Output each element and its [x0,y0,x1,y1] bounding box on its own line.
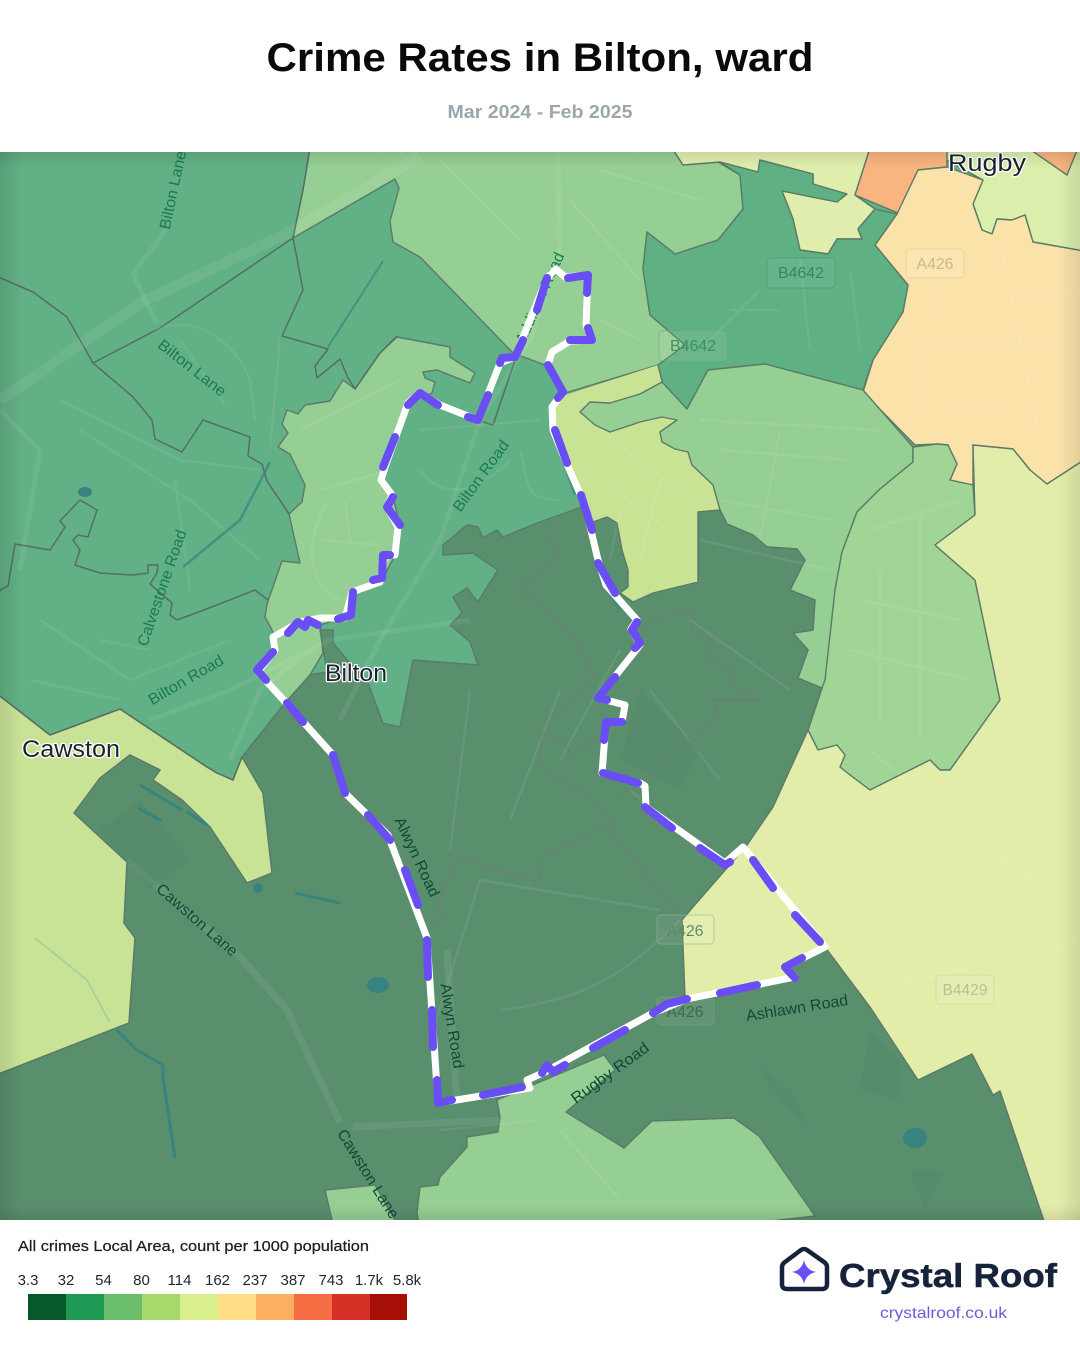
legend scale labels: 387 [280,1272,306,1289]
icon: house with star [782,1249,827,1289]
shield: B4429 [936,975,994,1004]
legend title: All crimes Local Area, count per 1000 population [18,1238,369,1255]
subtitle: date range: Mar 2024 - Feb 2025 [448,102,632,122]
road label: Rugby Road: Rugby Road [568,1039,653,1107]
dark-area internal boundaries [430,533,760,930]
title: Crime Rates in Bilton, ward [266,36,814,80]
shield: A426 south: A426 [666,1004,704,1021]
shield: A426 north: A426 [916,256,954,273]
shield: B4642 east [767,258,835,288]
road label: Cawston Lane west: Cawston Lane [153,881,241,960]
legend scale labels [18,1272,422,1289]
brand website: crystalroof.co.uk [880,1305,1008,1322]
legend colour bar [28,1294,407,1320]
road label: Alwyn Road south: Alwyn Road [436,982,467,1070]
legend scale labels: 3.3 [18,1272,38,1289]
brand name: Crystal Roof [839,1257,1058,1294]
legend scale labels: 32 [58,1272,74,1289]
shield: B4642 east: B4642 [778,265,824,282]
road label: Bilton Road centre: Bilton Road [450,437,513,515]
road label: Bilton Road west: Bilton Road [146,652,227,709]
brand logo [782,1249,1058,1322]
map edge shading [0,152,1080,1220]
legend scale labels: 80 [133,1272,150,1289]
place label: Rugby: Rugby [948,150,1026,177]
choropleth map panel [0,148,1080,1224]
legend scale labels: 162 [205,1272,230,1289]
shield: A426 south [657,997,714,1025]
road label: Calvestone Road: Calvestone Road [135,528,190,649]
road shields [657,249,994,1025]
road label: Bilton Lane: Bilton Lane [154,336,229,400]
legend scale labels: 114 [168,1272,191,1289]
legend scale labels: 54 [95,1272,112,1289]
road label: Ashlawn Road: Ashlawn Road [745,992,849,1025]
legend [18,1238,422,1320]
shield: A426 centre [657,915,714,944]
place label: Bilton: Bilton [325,660,387,687]
legend scale labels: 5.8k [393,1272,422,1289]
map area polygons [0,148,1080,1224]
woodland and water features [35,261,945,1210]
shield: A426 north [906,249,964,278]
shield: A426 centre: A426 [666,923,704,940]
shield: B4642 west [659,331,727,361]
road labels [135,149,849,1222]
road label: Bilton Lane north: Bilton Lane [157,149,190,231]
legend scale labels: 1.7k [355,1272,384,1289]
legend scale labels: 237 [242,1272,268,1289]
ward boundary purple dashes [257,275,820,1103]
ward boundary [257,269,825,1103]
road label: Alwyn Road north: Alwyn Road [391,815,442,900]
ward boundary white casing [258,269,825,1103]
local area boundary lines [0,148,515,780]
street network [0,222,902,1131]
road label: Cawston Lane south: Cawston Lane [333,1127,402,1222]
shield: B4429: B4429 [942,982,988,999]
legend scale labels: 743 [318,1272,344,1289]
road label: Addison Road: Addison Road [513,250,568,346]
place label: Cawston: Cawston [22,736,120,763]
shield: B4642 west: B4642 [670,338,716,355]
